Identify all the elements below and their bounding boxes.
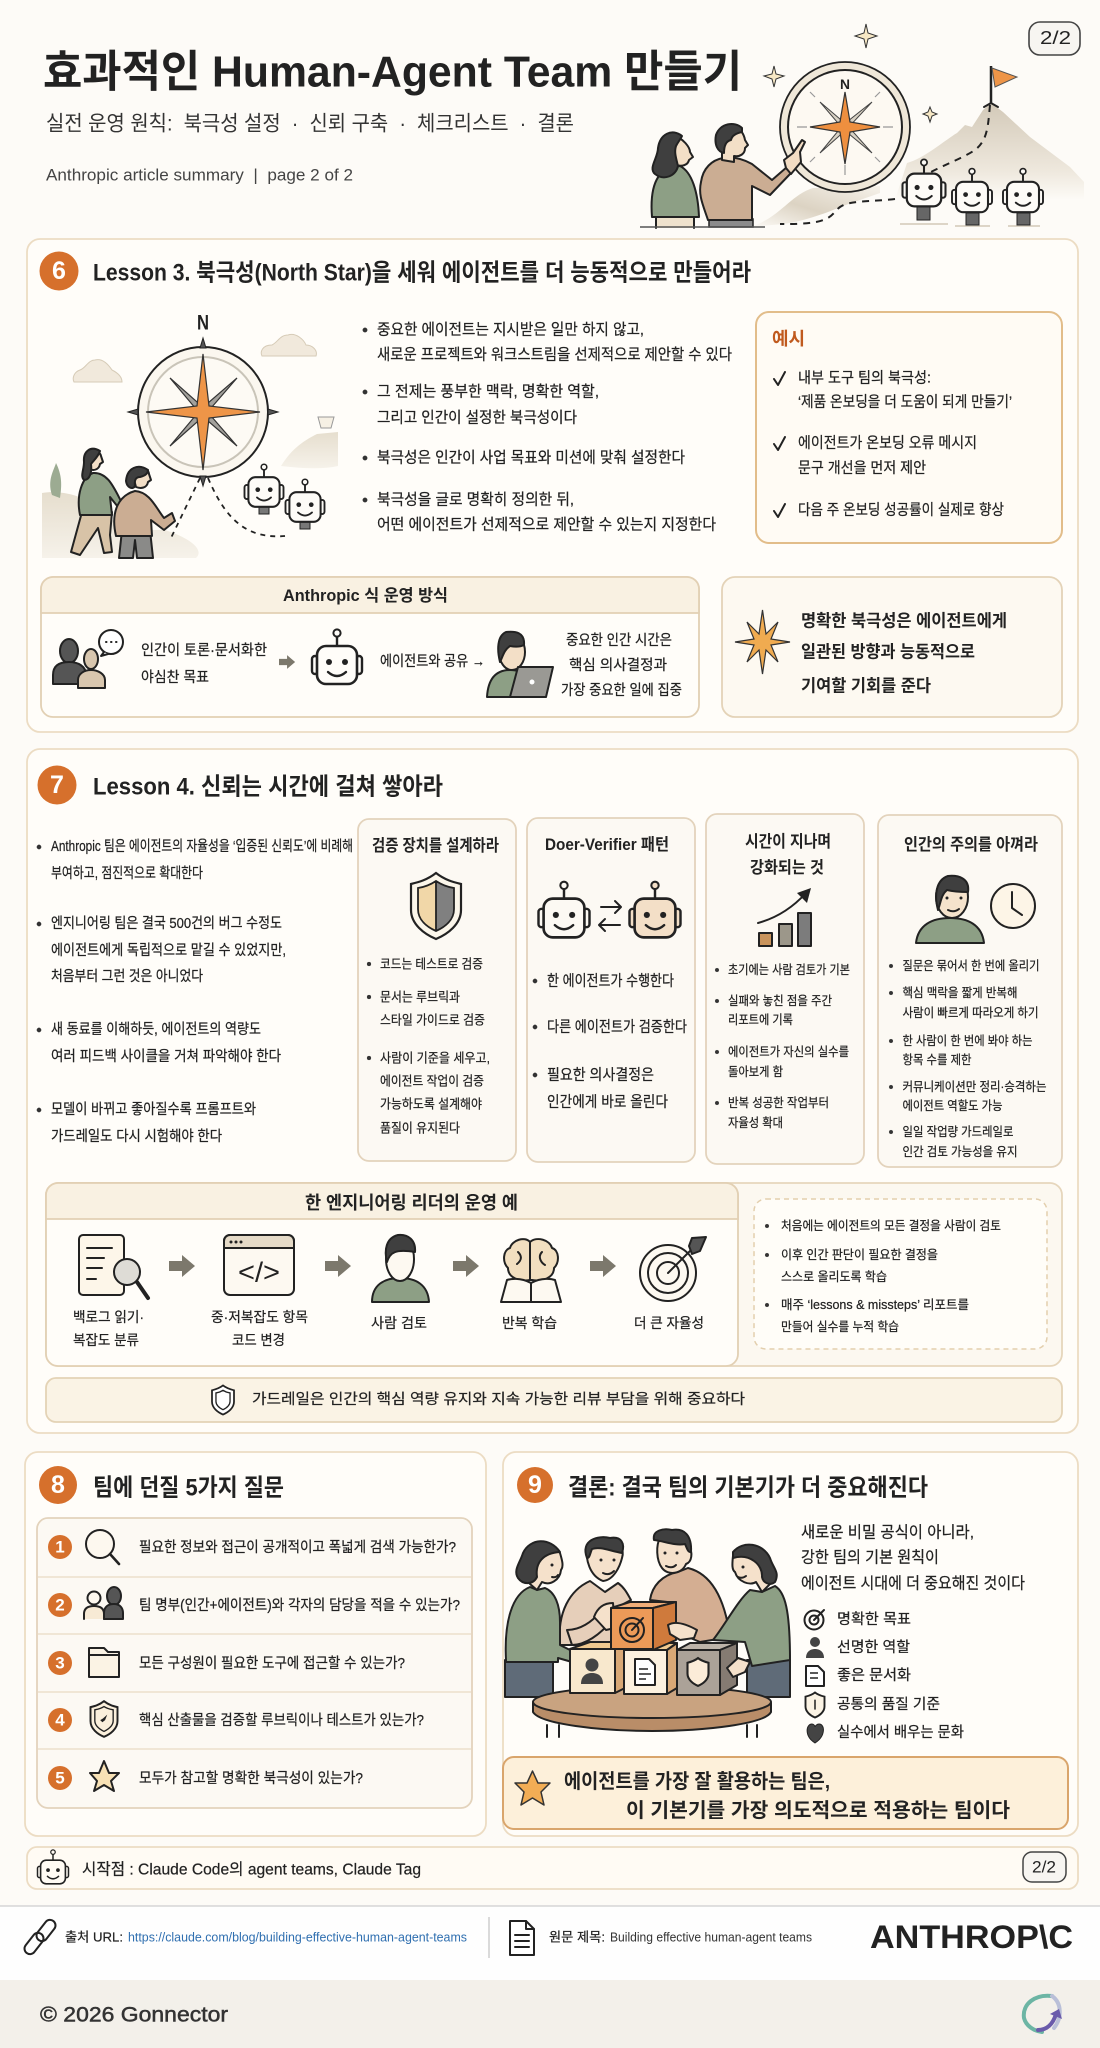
workflow labels: 코드 변경 [232, 1332, 285, 1348]
example box: 내부 도구 팀의 북극성: [798, 370, 931, 386]
card: protect human attention: 일일 작업량 가드레일로 [902, 1125, 1014, 1139]
question 1: 필요한 정보와 접근이 공개적이고 폭넓게 검색 가능한가? [139, 1539, 456, 1556]
north star takeaway callout [722, 577, 1062, 717]
section badge 8: 8 [51, 1471, 65, 1499]
page badge: 2/2 [1032, 1858, 1056, 1876]
conclusion heading: 결론: 결국 팀의 기본기가 더 중요해진다 [568, 1474, 928, 1502]
fundamentals list: 명확한 목표 [837, 1611, 911, 1628]
section badge 8 [39, 1466, 77, 1504]
section badge 7: 7 [50, 771, 64, 799]
fundamentals list: 공통의 품질 기준 [837, 1696, 940, 1713]
page badge [1029, 22, 1080, 55]
example box: ‘제품 온보딩을 더 도움이 되게 만들기’ [798, 394, 1012, 410]
question 3 [48, 1648, 405, 1677]
section badge 6: 6 [52, 257, 66, 285]
panel: lesson 3 north star [27, 239, 1078, 732]
article note: Anthropic article summary | page 2 of 2 [46, 166, 353, 184]
card: compounding over time [706, 814, 864, 1164]
dashed notes [754, 1199, 1047, 1349]
workflow labels [73, 1309, 704, 1348]
lesson 4 bullets: 여러 피드백 사이클을 거쳐 파악해야 한다 [51, 1048, 281, 1065]
arrow [169, 1255, 195, 1277]
card: doer-verifier: 인간에게 바로 올린다 [547, 1094, 668, 1110]
anthropic operating box [41, 577, 699, 717]
card: doer-verifier [527, 818, 695, 1162]
icon: shield [411, 873, 461, 939]
card: doer-verifier: Doer-Verifier 패턴 [545, 835, 669, 854]
source row [0, 1906, 1100, 1980]
card: protect human attention: 에이전트 역할도 가능 [902, 1099, 1002, 1113]
header illustration: compass, team, mountain and robots: N [840, 76, 850, 92]
workflow labels: 더 큰 자율성 [634, 1315, 704, 1331]
block: shield [677, 1643, 737, 1695]
icon: code window: </> [238, 1256, 280, 1288]
conclusion callout: 이 기본기를 가장 의도적으로 적용하는 팀이다 [626, 1799, 1010, 1822]
arrow [325, 1255, 351, 1277]
card: protect human attention: 항목 수를 제한 [902, 1053, 972, 1067]
question 2 [48, 1587, 460, 1619]
block: document [624, 1643, 677, 1694]
fundamentals list: 실수에서 배우는 문화 [837, 1724, 964, 1741]
card: verification: 품질이 유지된다 [380, 1120, 460, 1136]
man left of centre [560, 1537, 631, 1645]
page badge [1023, 1852, 1066, 1882]
card: verification: 스타일 가이드로 검증 [380, 1012, 485, 1028]
example box: 예시 [772, 329, 805, 349]
workflow labels: 백로그 읽기· [73, 1309, 144, 1325]
hands [668, 1623, 750, 1677]
lesson 3 bullets: 어떤 에이전트가 선제적으로 제안할 수 있는지 지정한다 [377, 516, 716, 534]
north star takeaway callout: 명확한 북극성은 에이전트에게 [801, 612, 1007, 630]
card: compounding over time: 반복 성공한 작업부터 [728, 1096, 829, 1110]
subtitle: 실전 운영 원칙: 북극성 설정 · 신뢰 구축 · 체크리스트 · 결론 [46, 112, 574, 136]
question 1 [48, 1530, 456, 1564]
original title: 원문 제목: [549, 1930, 605, 1944]
question 3: 3 [55, 1654, 65, 1672]
card: verification: 문서는 루브릭과 [380, 990, 460, 1004]
card: doer-verifier: 필요한 의사결정은 [547, 1066, 654, 1084]
anthropic operating box: 인간이 토론·문서화한 [141, 642, 267, 659]
panel: lesson 4 trust [27, 749, 1078, 1433]
card: verification: 가능하도록 설계해야 [380, 1096, 482, 1112]
card: compounding over time: 에이전트가 자신의 실수를 [728, 1045, 849, 1059]
lesson 3 bullets: 새로운 프로젝트와 워크스트림을 선제적으로 제안할 수 있다 [377, 346, 732, 364]
conclusion text: 새로운 비밀 공식이 아니라, [801, 1524, 974, 1542]
woman right [713, 1545, 790, 1697]
lesson 4 bullets: 새 동료를 이해하듯, 에이전트의 역량도 [51, 1021, 261, 1038]
conclusion text: 강한 팀의 기본 원칙이 [801, 1548, 939, 1566]
anthropic operating box: 핵심 의사결정과 [569, 657, 667, 674]
card: compounding over time: 시간이 지나며 [745, 832, 831, 851]
lesson 3 bullets: 그 전제는 풍부한 맥락, 명확한 역할, [377, 382, 599, 400]
logo: gonnector [1024, 1996, 1062, 2032]
guardrail banner [46, 1378, 1062, 1422]
guardrail banner: 가드레일은 인간의 핵심 역량 유지와 지속 가능한 리뷰 부담을 위해 중요하다 [252, 1391, 745, 1408]
arrow [279, 655, 295, 669]
card: verification: 에이전트 작업이 검증 [380, 1074, 484, 1088]
lesson 4 bullets: 엔지니어링 팀은 결국 500건의 버그 수정도 [51, 915, 282, 932]
table [533, 1686, 771, 1737]
arrow [453, 1255, 479, 1277]
anthropic operating box: Anthropic 식 운영 방식 [283, 586, 448, 605]
fundamentals list: 좋은 문서화 [837, 1667, 911, 1684]
robots [900, 159, 1043, 226]
footer [0, 1980, 1100, 2048]
section badge 9 [517, 1467, 553, 1503]
illustration: compass with walkers and robots: N [197, 312, 209, 334]
card: protect human attention: 인간 검토 가능성을 유지 [902, 1145, 1018, 1159]
lesson 4 heading: Lesson 4. 신뢰는 시간에 걸쳐 쌓아라 [93, 774, 443, 800]
icon: robot [38, 1850, 68, 1884]
lesson 3 bullets: 중요한 에이전트는 지시받은 일만 하지 않고, [377, 320, 644, 338]
fundamentals list: 선명한 역할 [837, 1639, 910, 1656]
lesson 4 bullets: 에이전트에게 독립적으로 맡길 수 있었지만, [51, 942, 286, 959]
card: protect human attention: 사람이 빠르게 따라오게 하기 [902, 1006, 1038, 1020]
icon: robot [312, 629, 362, 684]
starting point bar: 시작점 : Claude Code의 agent teams, Claude Tag [82, 1860, 421, 1878]
example box [756, 312, 1062, 543]
card: protect human attention [878, 815, 1062, 1167]
lesson 4 bullets: 가드레일도 다시 시험해야 한다 [51, 1128, 222, 1145]
question 5 [48, 1761, 363, 1791]
icon: link [22, 1918, 58, 1956]
question list [37, 1518, 472, 1808]
card: compounding over time: 리포트에 기록 [728, 1013, 793, 1027]
icon: person with laptop [487, 632, 553, 697]
copyright: © 2026 Gonnector [40, 2004, 228, 2026]
man right of centre [650, 1529, 730, 1642]
dashed notes: 만들어 실수를 누적 학습 [781, 1320, 899, 1334]
woman [652, 132, 699, 228]
questions heading: 팀에 던질 5가지 질문 [93, 1474, 284, 1502]
section badge 6 [40, 252, 78, 290]
icon: document [510, 1921, 534, 1955]
starting point bar [27, 1847, 1078, 1889]
icon: two robots with swap arrows [538, 882, 680, 937]
section badge 7 [38, 766, 76, 804]
lesson 3 bullets [363, 320, 732, 534]
lesson 4 bullets: 처음부터 그런 것은 아니었다 [51, 968, 203, 985]
lesson 3 bullets: 북극성을 글로 명확히 정의한 뒤, [377, 490, 574, 508]
question 4: 핵심 산출물을 검증할 루브릭이나 테스트가 있는가? [139, 1712, 424, 1729]
icon: target with arrow [640, 1237, 706, 1301]
engineering leader workflow: 한 엔지니어링 리더의 운영 예 [305, 1193, 518, 1213]
conclusion text: 에이전트 시대에 더 중요해진 것이다 [801, 1574, 1025, 1592]
lesson 3 bullets: 그리고 인간이 설정한 북극성이다 [377, 408, 577, 426]
anthropic operating box: 가장 중요한 일에 집중 [561, 682, 682, 699]
card: compounding over time: 초기에는 사람 검토가 기본 [728, 963, 850, 977]
anthropic operating box: 중요한 인간 시간은 [566, 632, 672, 649]
lesson 4 bullets: Anthropic 팀은 에이전트의 자율성을 ‘입증된 신뢰도’에 비례해 [51, 838, 353, 855]
card: compounding over time: 돌아보게 함 [728, 1065, 783, 1079]
anthropic operating box: 에이전트와 공유 → [380, 653, 485, 670]
illustration: compass with walkers and robots [42, 312, 338, 558]
page badge: 2/2 [1040, 28, 1071, 48]
icon: document and magnifier [79, 1235, 148, 1298]
dashed notes: 이후 인간 판단이 필요한 결정을 [781, 1248, 938, 1262]
card: verification: 코드는 테스트로 검증 [380, 956, 483, 972]
north star takeaway callout: 일관된 방향과 능동적으로 [801, 642, 975, 662]
card: protect human attention: 한 사람이 한 번에 봐야 하는 [902, 1034, 1032, 1048]
question 4 [48, 1701, 424, 1737]
section badge 9: 9 [528, 1471, 542, 1499]
card: doer-verifier: 다른 에이전트가 검증한다 [547, 1018, 687, 1036]
card: protect human attention: 핵심 맥락을 짧게 반복해 [902, 985, 1018, 1000]
icon: person and clock [916, 876, 1035, 943]
icon: brain and book [501, 1239, 561, 1302]
lesson 3 bullets: 북극성은 인간이 사업 목표와 미션에 맞춰 설정한다 [377, 448, 685, 466]
engineering leader workflow [46, 1183, 1062, 1366]
logo: anthropic: ANTHROP\C [870, 1919, 1073, 1955]
example box: 문구 개선을 먼저 제안 [798, 460, 926, 476]
dashed notes: 스스로 올리도록 학습 [781, 1270, 887, 1284]
panel: conclusion [503, 1452, 1078, 1836]
original title: Building effective human-agent teams [610, 1930, 812, 1944]
card: compounding over time: 자율성 확대 [728, 1116, 783, 1130]
source url: 출처 URL: [65, 1930, 123, 1944]
header illustration: compass, team, mountain and robots [640, 24, 1084, 228]
question 4: 4 [55, 1710, 65, 1730]
question 1: 1 [55, 1538, 65, 1556]
question 5: 5 [55, 1768, 65, 1788]
example box: 에이전트가 온보딩 오류 메시지 [798, 434, 977, 452]
icon: human reviewer [372, 1235, 429, 1302]
workflow labels: 복잡도 분류 [73, 1332, 139, 1348]
woman left [505, 1541, 574, 1697]
lesson 4 bullets [37, 838, 353, 1145]
card: verification: 사람이 기준을 세우고, [380, 1050, 490, 1066]
workflow labels: 반복 학습 [502, 1315, 557, 1331]
north star takeaway callout: 기여할 기회를 준다 [801, 676, 931, 696]
panel: five questions [25, 1452, 486, 1836]
question 2: 2 [55, 1596, 65, 1614]
title: 효과적인 Human-Agent Team 만들기 [43, 48, 742, 96]
workflow labels: 중·저복잡도 항목 [211, 1309, 308, 1325]
card: protect human attention: 커뮤니케이션만 정리·승격하는 [902, 1080, 1046, 1094]
icon: code window [224, 1235, 294, 1295]
card: verification [358, 819, 516, 1161]
card: protect human attention: 질문은 묶어서 한 번에 올리기 [902, 959, 1040, 973]
card: compounding over time: 실패와 놓친 점을 주간 [728, 994, 832, 1008]
header [43, 22, 1084, 228]
icon: people with speech bubble [53, 630, 123, 688]
source url: https://claude.com/blog/building-effective-human-agent-teams [128, 1930, 467, 1944]
card: compounding over time: 강화되는 것 [750, 858, 824, 877]
walkers [71, 449, 175, 558]
icon: growth bars [758, 888, 811, 946]
arrow [590, 1255, 616, 1277]
block: person [570, 1642, 625, 1693]
anthropic operating box: 야심찬 목표 [141, 669, 209, 686]
lesson 4 bullets: 모델이 바뀌고 좋아질수록 프롬프트와 [51, 1101, 256, 1118]
question 2: 팀 명부(인간+에이전트)와 각자의 담당을 적을 수 있는가? [139, 1597, 460, 1614]
conclusion callout: 에이전트를 가장 잘 활용하는 팀은, [564, 1770, 830, 1793]
conclusion callout [503, 1757, 1068, 1829]
workflow labels: 사람 검토 [371, 1315, 427, 1331]
dashed notes: 처음에는 에이전트의 모든 결정을 사람이 검토 [781, 1219, 1001, 1233]
lesson 3 heading: Lesson 3. 북극성(North Star)을 세워 에이전트를 더 능동적으로 만들어라 [93, 260, 751, 286]
question 5: 모두가 참고할 명확한 북극성이 있는가? [139, 1770, 363, 1787]
fundamentals list [804, 1610, 964, 1743]
man [700, 124, 805, 227]
question 3: 모든 구성원이 필요한 도구에 접근할 수 있는가? [139, 1655, 405, 1672]
card: verification: 검증 장치를 설계하라 [372, 836, 499, 855]
card: doer-verifier: 한 에이전트가 수행한다 [547, 972, 674, 990]
conclusion text [801, 1524, 1025, 1592]
card: protect human attention: 인간의 주의를 아껴라 [904, 835, 1038, 854]
block: target [611, 1602, 676, 1650]
dashed notes: 매주 ‘lessons & missteps’ 리포트를 [781, 1298, 969, 1312]
example box: 다음 주 온보딩 성공률이 실제로 향상 [798, 502, 1004, 518]
lesson 4 bullets: 부여하고, 점진적으로 확대한다 [51, 865, 203, 882]
illustration: team building blocks around a table [505, 1529, 790, 1737]
